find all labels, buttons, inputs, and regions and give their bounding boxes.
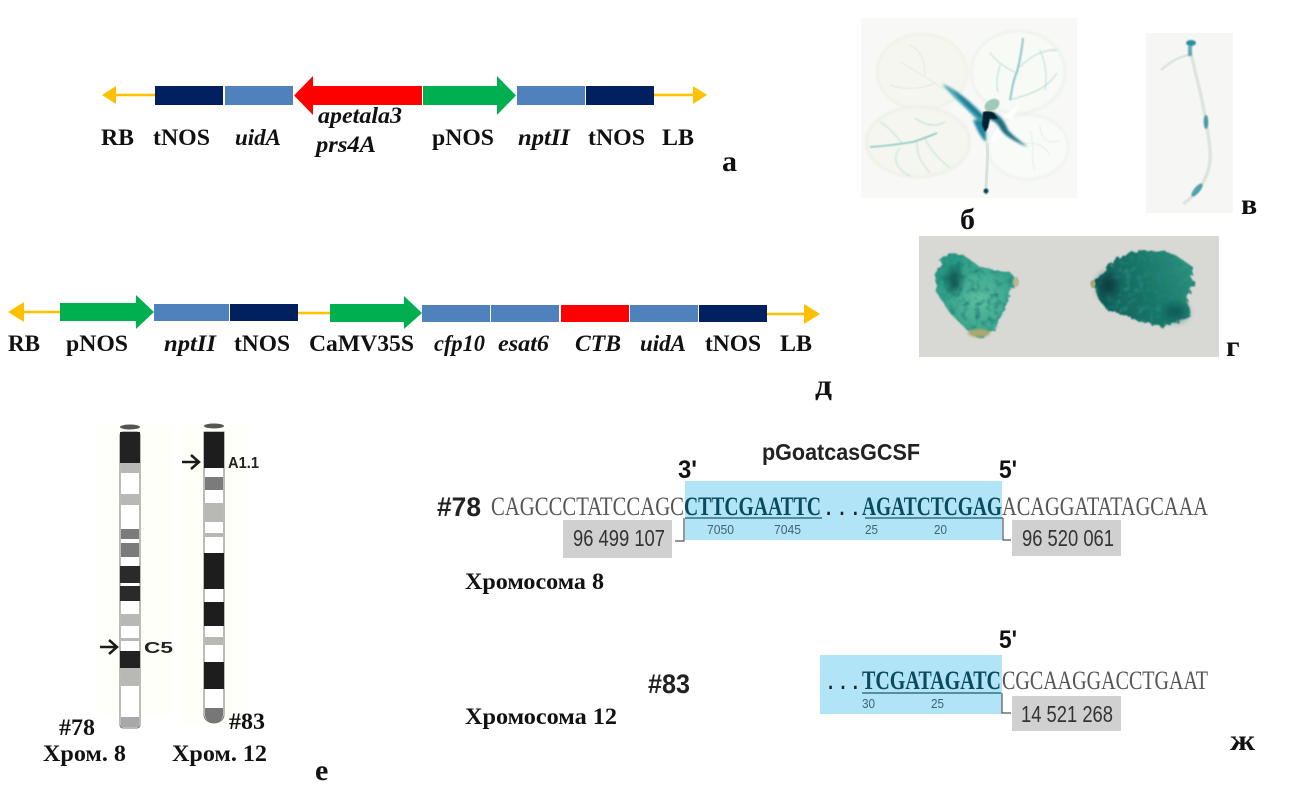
chromosome captions: Хром. 8 [43,741,126,766]
junction sequence: TCGATAGATC [862,666,1001,695]
photo: stained calli [919,236,1219,357]
chromosome 8 ideogram [98,424,173,728]
panel letter a: а [722,145,737,178]
positions: 30 [862,696,875,711]
dots: ... [824,671,862,696]
arrow to A1.1 [182,455,199,469]
panel letter v: в [1241,188,1257,221]
labels for construct a: pNOS [432,125,494,150]
LB arrowhead [804,304,820,324]
positions: 25 [865,522,878,537]
labels for construct d [8,331,812,356]
leaves [866,31,1068,179]
insertion site, line 78 [437,439,1208,558]
plasmid name: pGoatcasGCSF [762,439,920,465]
cfp10 block [422,305,490,322]
blue stains [1186,40,1208,198]
stained veins [870,38,1057,176]
labels for construct a [101,103,694,157]
callus left [935,252,1018,339]
tNOS block [155,86,223,105]
labels for construct d: tNOS [234,331,290,356]
labels for construct a: tNOS [153,125,210,150]
labels for construct a: LB [662,125,694,150]
line label: #83 [648,669,690,699]
gene construct a [102,76,707,115]
5 prime: 5' [999,626,1017,654]
callus right [1092,250,1193,327]
panel letter zh: ж [1230,724,1255,757]
LB arrowhead [693,86,707,104]
RB border arrow [18,311,60,313]
chromosome captions: #78 [59,715,95,740]
panel letter d: д [815,369,832,402]
band label A1.1: A1.1 [228,455,259,472]
positions [707,522,947,537]
coordinate box [1012,696,1121,731]
RB arrowhead [102,86,116,104]
stained arms [942,84,1028,147]
junction sequence right: AGATCTCGAG [862,492,1002,521]
chromosome captions [43,709,267,766]
labels for construct a: RB [101,125,134,150]
coordinate box right [1012,520,1121,556]
panel letter b: б [960,203,975,236]
dots: ... [822,497,862,522]
positions: 7050 [707,522,734,537]
labels for construct a: nptII [518,125,571,150]
coordinate box left [563,520,672,558]
chromosome captions: #83 [229,709,265,734]
CaMV35S green arrow [330,296,422,329]
labels for construct d: CaMV35S [309,331,414,356]
bracket [1002,693,1011,713]
pNOS green arrow [60,295,154,329]
esat6 block [491,305,559,322]
labels for construct d: cfp10 [434,331,485,356]
insertion site, line 78: 96 520 061 [1022,525,1114,551]
bracket right [1003,518,1011,540]
nptII block [517,86,585,105]
labels for construct d: tNOS [705,331,761,356]
underlines [685,517,1003,519]
nptII block [154,304,229,321]
positions: 25 [931,696,944,711]
3 prime: 3' [678,456,697,484]
faint veins [890,45,1060,170]
gene construct d [8,295,820,329]
positions: 20 [934,522,947,537]
apetala3 prs4A red arrow [294,76,422,115]
flanking sequence right: ACAGGATATAGCAAA [1002,492,1208,521]
labels for construct a: apetala3 [318,103,402,128]
RB border arrow [115,94,155,96]
labels for construct a: tNOS [588,125,645,150]
insertion site, line 83 [648,626,1208,731]
RB arrowhead [8,302,24,322]
panel letter g: г [1226,330,1240,363]
bracket left [675,518,684,541]
tNOS block [586,86,654,105]
5 prime: 5' [999,456,1017,484]
flanking sequence left: CAGCCCTATCCAGC [491,492,684,521]
band label C5: C5 [144,640,173,657]
blue insert region [820,655,1002,714]
underline [862,692,1001,694]
positions [862,696,944,711]
tNOS block [230,304,298,321]
chromosome 12 caption: Хромосома 12 [465,704,617,729]
labels for construct d: pNOS [66,331,128,356]
linker [298,312,330,314]
labels for construct d: CTB [575,331,621,356]
labels for construct d: LB [780,331,812,356]
small central leaf [982,96,1002,114]
arrow to C5 [100,640,117,654]
labels for construct d: RB [8,331,40,356]
LB border arrow [654,94,695,96]
labels for construct d: nptII [164,331,217,356]
blue insert region [685,481,1002,540]
positions: 7045 [774,522,801,537]
labels for construct a: prs4A [314,132,376,157]
chromosome captions: Хром. 12 [172,741,267,766]
labels for construct a: uidA [235,125,281,150]
CTB block [561,305,629,322]
photo: stained seedling [861,18,1077,198]
dark centre [982,111,998,132]
insertion site, line 78: 96 499 107 [573,525,665,551]
insertion site, line 83: 14 521 268 [1021,701,1113,727]
tNOS block [699,305,767,322]
side root [1161,55,1190,70]
white gaps between leaves [958,100,1020,141]
labels for construct d: uidA [640,331,686,356]
panel letter e: е [315,754,328,787]
line label: #78 [437,492,481,522]
pNOS green arrow [423,76,516,115]
uidA block [225,86,293,105]
flanking sequence: CGCAAGGACCTGAAT [1002,666,1208,695]
chromosome 12 ideogram [181,424,259,725]
chromosome 8 caption: Хромосома 8 [465,569,604,594]
stem [986,143,988,195]
LB border arrow [767,313,808,315]
uidA block [630,305,698,322]
labels for construct d: esat6 [498,331,550,356]
root tip [984,188,988,194]
junction sequence left: CTTCGAATTC [684,492,821,521]
photo: stained root [1146,33,1233,213]
